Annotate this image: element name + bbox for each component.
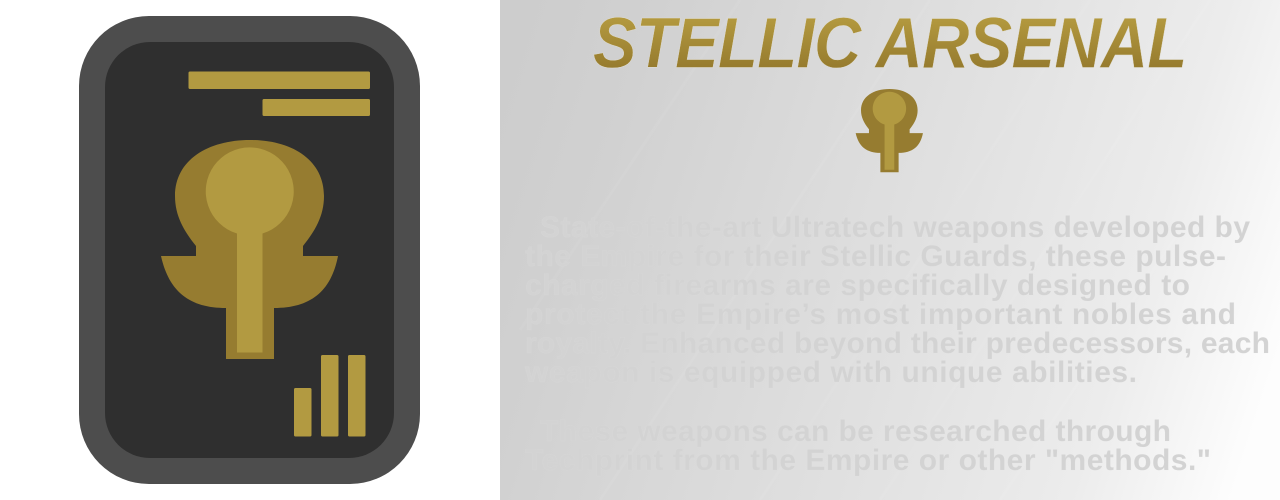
text block: description: weapon is equipped with unique abilities. bbox=[524, 356, 1137, 389]
text block: description: charged firearms are specifically designed to bbox=[525, 269, 1190, 302]
panel: info background bbox=[500, 0, 1280, 500]
card outer frame bbox=[79, 16, 420, 484]
panel: background bbox=[0, 0, 500, 500]
text block: description: State-of-the-art Ultratech weapons developed by bbox=[540, 211, 1250, 244]
card bbox=[79, 16, 420, 484]
card inner panel bbox=[105, 42, 394, 458]
title: STELLIC ARSENAL bbox=[593, 4, 1187, 83]
text block: research note bbox=[525, 415, 1211, 477]
icon: emblem large bbox=[161, 140, 338, 359]
rarity bars top bbox=[188, 72, 370, 116]
signal level bars bbox=[294, 355, 366, 436]
text block: research note: Techprint from the Empire or other "methods." bbox=[525, 444, 1211, 477]
text block: description: the Empire for their Stellic Guards, these pulse- bbox=[525, 240, 1226, 273]
text block: description: protect the Empire’s most important nobles and bbox=[525, 298, 1236, 331]
text block: description: royalty. Enhanced beyond their predecessors, each bbox=[525, 327, 1270, 360]
icon: emblem small bbox=[856, 89, 923, 172]
text block: research note: These weapons can be researched through bbox=[540, 415, 1171, 448]
text block: description bbox=[524, 211, 1270, 389]
